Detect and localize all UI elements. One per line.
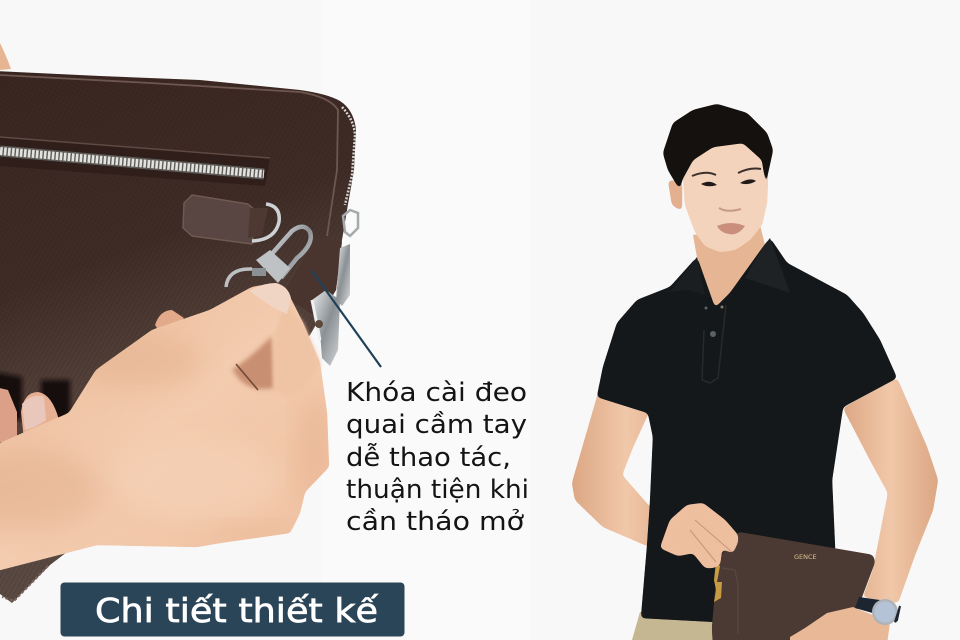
side strap: [282, 238, 342, 318]
callout text: dễ thao tác,: [346, 442, 511, 473]
gold clasp: [714, 562, 722, 602]
face: [668, 135, 768, 252]
title button: Chi tiết thiết kế: [95, 591, 379, 630]
callout leader line: [312, 271, 381, 367]
callout text: thuận tiện khi: [346, 475, 529, 505]
metal clasp: [226, 227, 311, 287]
right arm: [843, 378, 938, 603]
callout text: quai cầm tay: [346, 410, 527, 440]
holding hand: [660, 503, 738, 568]
wristwatch: [855, 597, 900, 625]
photo: man in black polo holding clutch: [572, 104, 938, 640]
lower hand: [790, 607, 890, 640]
bag body: [0, 71, 356, 603]
clutch: [712, 532, 875, 640]
strap tab and D-ring: [183, 195, 279, 244]
hair: [663, 104, 773, 193]
trousers: [632, 612, 716, 640]
hand: [0, 283, 331, 575]
metal zipper pull hardware: [312, 210, 358, 366]
title button: [60, 582, 404, 636]
fingertip behind bag: [0, 43, 11, 70]
neck: [693, 225, 765, 310]
shirt: [597, 238, 897, 622]
clutch: GENCE: [794, 553, 817, 561]
zipper pocket: [0, 137, 270, 186]
left arm: [572, 380, 680, 556]
callout text: [346, 378, 529, 537]
callout text: Khóa cài đeo: [346, 378, 527, 408]
callout text: cần tháo mở: [346, 507, 524, 537]
fingers behind the bag: [0, 310, 184, 442]
photo: bag close-up with hand: [0, 43, 358, 603]
